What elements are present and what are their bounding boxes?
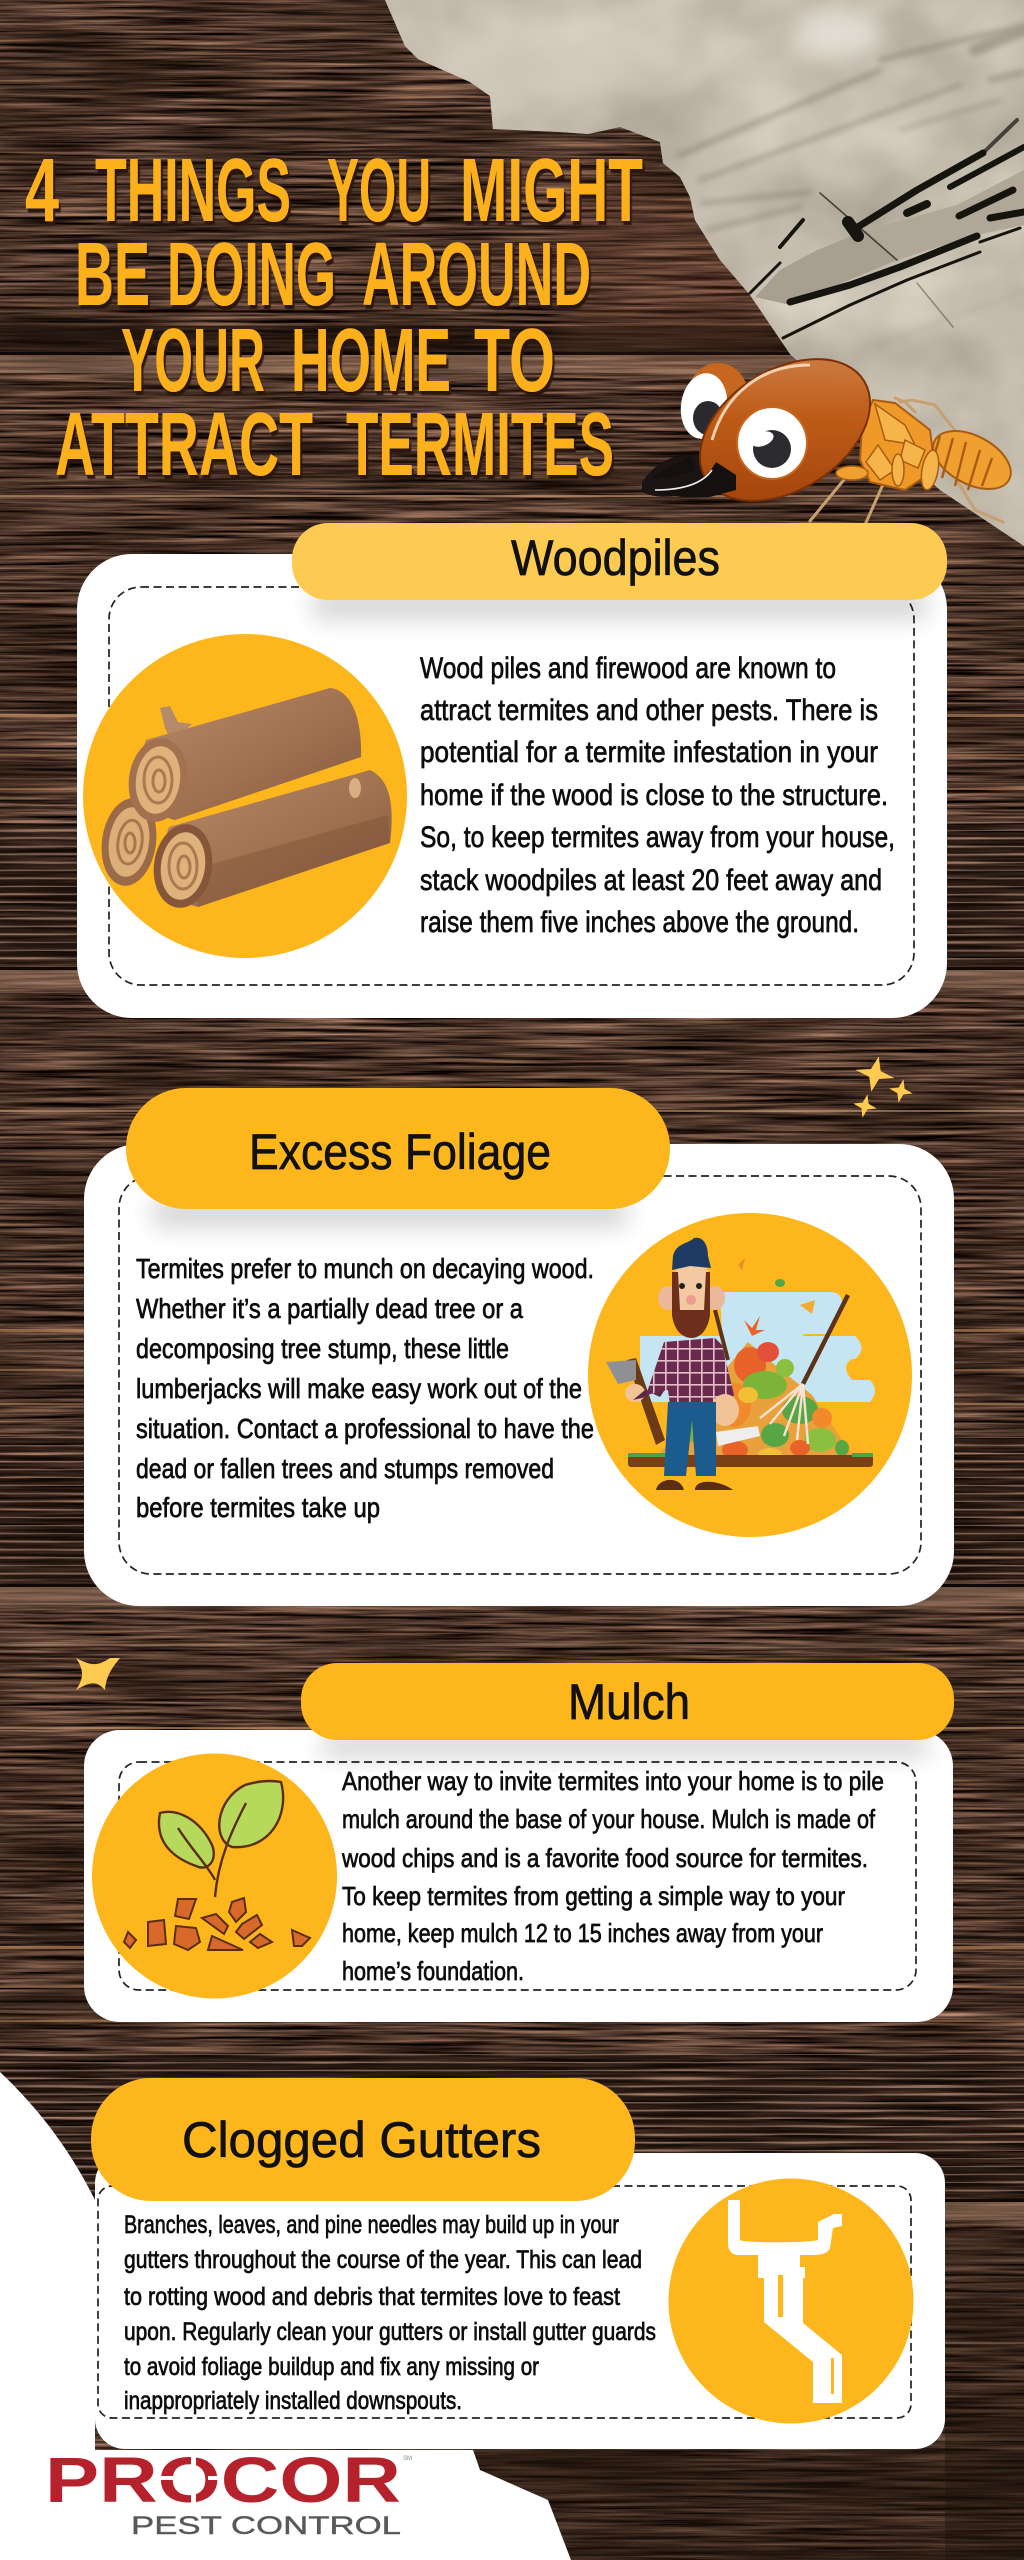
logo: Procor Pest Control: PEST CONTROL [131, 2512, 401, 2540]
text: woodpiles body: raise them five inches above the ground. [420, 906, 859, 939]
title: YOUR [121, 311, 265, 411]
panel: excess foliage [84, 1088, 954, 1606]
title: AROUND [362, 225, 591, 325]
icon: lumberjack raking leaves [588, 1213, 912, 1537]
text: excess foliage body: lumberjacks will make easy work out of the [136, 1373, 582, 1404]
heading pill: Woodpiles: Woodpiles [511, 530, 720, 586]
text: excess foliage body: decomposing tree stump, these little [136, 1333, 509, 1364]
text: woodpiles body: attract termites and other pests. There is [420, 694, 878, 727]
text: clogged gutters body: upon. Regularly clean your gutters or install gutter guards [124, 2318, 656, 2346]
text: woodpiles body: potential for a termite infestation in your [420, 736, 878, 769]
title: 4 [25, 141, 59, 241]
panel: woodpiles [77, 523, 947, 1018]
text: excess foliage body: Whether it’s a partially dead tree or a [136, 1293, 523, 1324]
text: mulch body: To keep termites from getting a simple way to your [342, 1881, 845, 1911]
text: woodpiles body [420, 652, 895, 939]
text: excess foliage body: dead or fallen trees and stumps removed [136, 1453, 554, 1484]
icon: stacked logs [83, 634, 407, 958]
text: mulch body: home’s foundation. [342, 1956, 524, 1986]
heading pill: Woodpiles [292, 523, 947, 600]
title: YOU [327, 141, 431, 241]
text: excess foliage body [136, 1253, 594, 1523]
text: clogged gutters body: gutters throughout the course of the year. This can lead [124, 2246, 642, 2274]
text: woodpiles body: home if the wood is close to the structure. [420, 779, 888, 812]
text: woodpiles body: Wood piles and firewood are known to [420, 652, 836, 685]
heading pill: Clogged Gutters [91, 2078, 635, 2201]
title: HOME [291, 311, 451, 411]
icon: gutter and downspout [668, 2178, 914, 2424]
text: excess foliage body: Termites prefer to munch on decaying wood. [136, 1253, 594, 1284]
title: THINGS [95, 141, 291, 241]
title: ATTRACT [55, 395, 313, 495]
text: clogged gutters body: Branches, leaves, and pine needles may build up in your [124, 2211, 619, 2239]
white corner shape behind logo [0, 2072, 571, 2560]
heading pill: Mulch: Mulch [568, 1674, 690, 1730]
icon: sparkle stars [851, 1052, 915, 1120]
title [25, 141, 643, 495]
icon: sparkle star [76, 1658, 120, 1690]
text: woodpiles body: So, to keep termites away from your house, [420, 821, 895, 854]
text: mulch body: home, keep mulch 12 to 15 inches away from your [342, 1918, 823, 1948]
speckled grey bark plates [755, 170, 1024, 305]
text: clogged gutters body [124, 2211, 656, 2415]
title: TERMITES [346, 395, 614, 495]
icon: sapling and mulch chips [92, 1754, 337, 1998]
icon: cartoon termite [642, 330, 1020, 536]
logo: Procor Pest Control: PROCOR [45, 2444, 401, 2516]
heading pill: Mulch [301, 1663, 954, 1740]
panel: clogged gutters [91, 2078, 945, 2449]
torn beige cracked wood corner [380, 0, 1024, 550]
text: clogged gutters body: inappropriately installed downspouts. [124, 2387, 462, 2415]
panel: mulch [84, 1663, 954, 2022]
text: mulch body: wood chips and is a favorite food source for termites. [341, 1843, 868, 1873]
heading pill: Excess Foliage [126, 1088, 670, 1209]
text: excess foliage body: before termites take up [136, 1492, 380, 1523]
title: TO [474, 311, 555, 411]
text: excess foliage body: situation. Contact a professional to have the [136, 1413, 594, 1444]
text: woodpiles body: stack woodpiles at least 20 feet away and [420, 864, 882, 897]
text: clogged gutters body: to rotting wood and debris that termites love to feast [124, 2283, 620, 2311]
text: clogged gutters body: to avoid foliage buildup and fix any missing or [124, 2353, 539, 2381]
logo: Procor Pest Control [45, 2444, 412, 2540]
title: MIGHT [460, 141, 643, 241]
text: mulch body [341, 1766, 884, 1986]
text: mulch body: Another way to invite termites into your home is to pile [342, 1766, 884, 1796]
heading pill: Clogged Gutters: Clogged Gutters [182, 2112, 541, 2168]
title: DOING [167, 225, 336, 325]
heading pill: Excess Foliage: Excess Foliage [249, 1124, 551, 1180]
title: BE [75, 225, 150, 325]
logo: Procor Pest Control: SM [403, 2456, 412, 2462]
text: mulch body: mulch around the base of your house. Mulch is made of [342, 1804, 876, 1834]
